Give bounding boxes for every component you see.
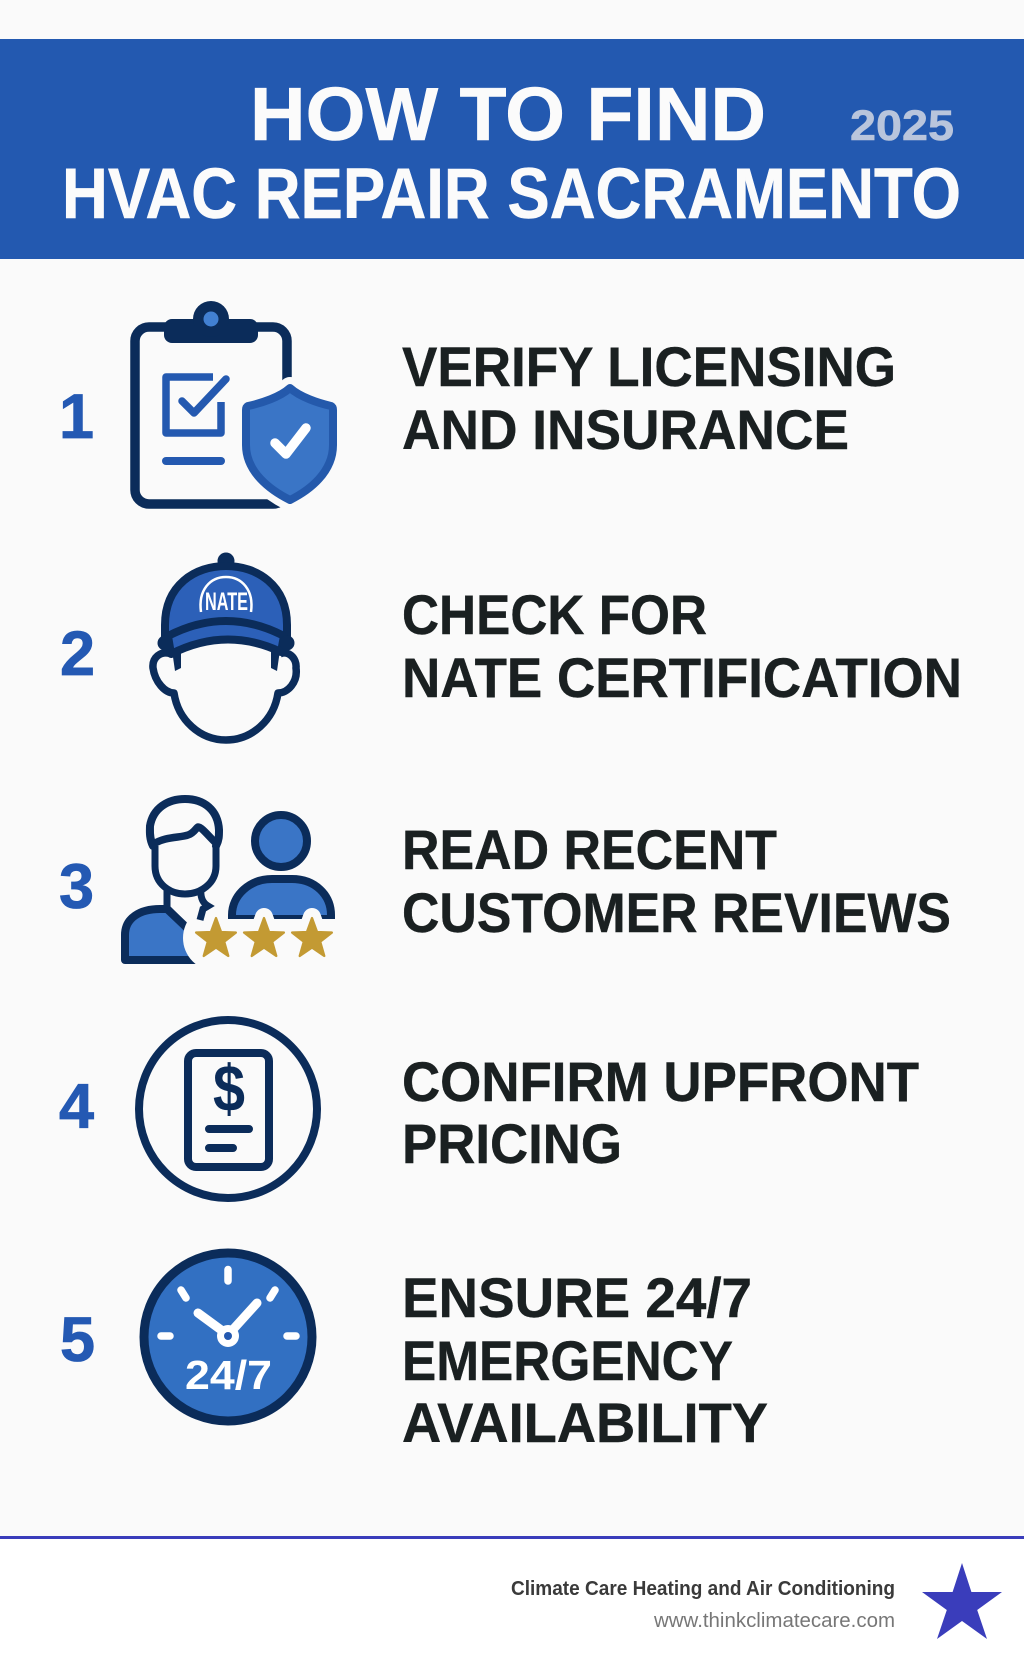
icon: technician with NATE cap xyxy=(153,552,296,740)
step 5 text: AVAILABILITY xyxy=(402,1391,768,1454)
step 2 text: NATE CERTIFICATION xyxy=(402,646,962,709)
icon: 24/7 clock xyxy=(144,1253,312,1421)
title: HOW TO FIND xyxy=(250,72,766,156)
step 1 text: VERIFY LICENSING xyxy=(402,335,896,398)
step 4 text xyxy=(402,1050,919,1175)
step 4 number: 4 xyxy=(59,1072,94,1142)
icon: price sheet in circle xyxy=(139,1020,317,1198)
year label: 2025 xyxy=(850,102,954,150)
step 1 text: AND INSURANCE xyxy=(402,398,849,461)
step 1 number: 1 xyxy=(59,382,94,452)
title xyxy=(62,72,961,234)
header banner xyxy=(0,39,1024,259)
step 3 number: 3 xyxy=(59,852,94,922)
icon: clipboard with shield xyxy=(135,301,333,504)
step 3 text: CUSTOMER REVIEWS xyxy=(402,881,951,944)
step 3 text: READ RECENT xyxy=(402,818,777,881)
icon: logo star xyxy=(922,1563,1002,1639)
step 5 number: 5 xyxy=(60,1305,95,1375)
step 5 text xyxy=(402,1266,768,1454)
step 2 text xyxy=(402,583,962,709)
step 5 text: EMERGENCY xyxy=(402,1329,733,1392)
step 2 text: CHECK FOR xyxy=(402,583,707,646)
footer xyxy=(0,1536,1024,1666)
icon: 24/7 clock: 24/7 xyxy=(185,1352,272,1398)
icon: technician with NATE cap: NATE xyxy=(205,588,248,616)
step 5 text: ENSURE 24/7 xyxy=(402,1266,752,1329)
step 4 text: PRICING xyxy=(402,1112,622,1175)
step 1 text xyxy=(402,335,896,461)
step 3 text xyxy=(402,818,951,944)
icon: customers with star rating xyxy=(125,799,340,975)
company name: Climate Care Heating and Air Conditioning xyxy=(511,1578,895,1600)
icon: price sheet in circle: $ xyxy=(213,1051,245,1125)
step 2 number: 2 xyxy=(60,619,95,689)
step 4 text: CONFIRM UPFRONT xyxy=(402,1050,919,1113)
website: www.thinkclimatecare.com xyxy=(653,1610,895,1632)
